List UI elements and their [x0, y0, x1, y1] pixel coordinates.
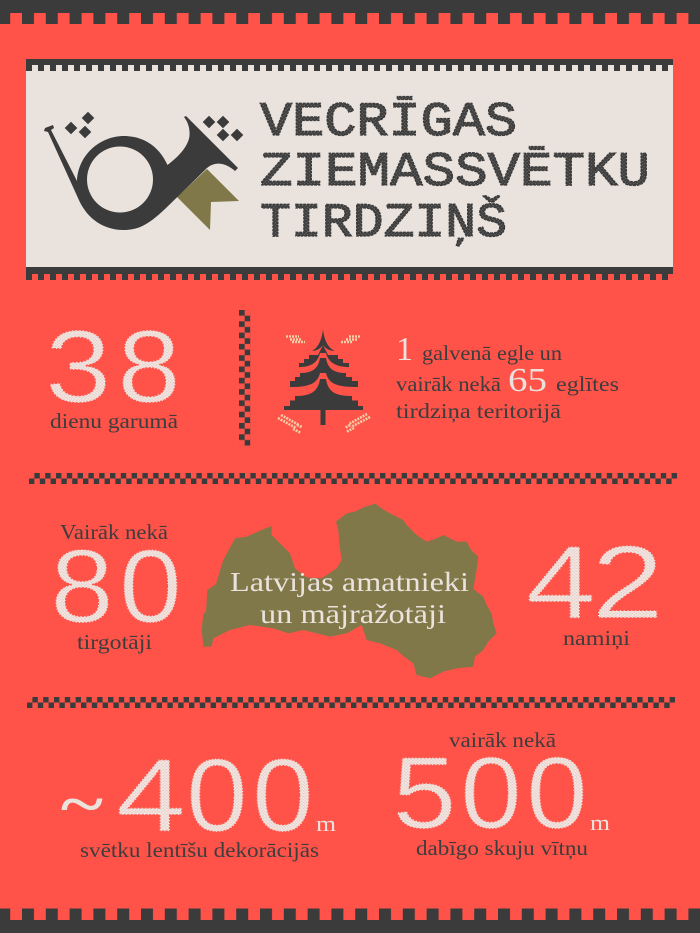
stat: 500 m garlands: 0	[526, 737, 588, 850]
map of Latvia	[202, 503, 497, 678]
map caption: Latvijas amatnieki	[230, 567, 469, 597]
stat: 500 m garlands: dabīgo skuju vītņu	[416, 836, 589, 860]
stat: 80 traders: 0	[119, 528, 182, 644]
title: TIRDZIŅŠ	[260, 195, 507, 251]
text: tree counts: 1	[396, 331, 413, 368]
stat: 500 m garlands: m	[590, 810, 610, 835]
title: VECRĪGAS	[260, 96, 517, 150]
stat: 80 traders: tirgotāji	[77, 630, 152, 654]
text: tree counts: 65	[508, 362, 547, 399]
vertical checker divider	[239, 310, 250, 446]
stat: 400 m ribbons	[60, 737, 336, 862]
icon: post horn with ribbon	[44, 112, 243, 230]
stat: 38 days: dienu garumā	[50, 409, 179, 433]
top border	[0, 0, 700, 24]
text: tree counts: vairāk nekā	[396, 372, 502, 396]
stat: 400 m ribbons: 0	[186, 737, 248, 853]
stat: 500 m garlands	[392, 728, 610, 860]
bottom border	[0, 908, 700, 933]
stat: 38 days: 8	[118, 309, 181, 424]
stat: 80 traders: Vairāk nekā	[60, 520, 169, 544]
text: tree counts: eglītes	[556, 372, 619, 396]
map caption	[230, 567, 469, 629]
stat: 42 houses: 4	[526, 525, 596, 641]
text: tree counts: tirdziņa teritorijā	[396, 399, 562, 423]
title	[260, 96, 650, 251]
panel: title banner	[26, 59, 673, 280]
title: ZIEMASSVĒTKU	[260, 146, 650, 200]
icon: Christmas tree	[278, 329, 370, 433]
stat: 80 traders	[50, 520, 182, 654]
text: tree counts: galvenā egle un	[422, 341, 563, 365]
checker divider	[29, 473, 677, 484]
stat: 38 days: 3	[45, 309, 111, 424]
stat: 42 houses: namiņi	[563, 626, 630, 650]
stat: 42 houses: 2	[592, 523, 664, 640]
stat: 38 days	[45, 309, 181, 433]
stat: 500 m garlands: 0	[460, 737, 522, 850]
stat: 80 traders: 8	[50, 529, 114, 645]
stat: 400 m ribbons: ~	[60, 771, 104, 839]
text: tree counts	[396, 331, 619, 423]
stat: 500 m garlands: 5	[392, 736, 457, 850]
stat: 500 m garlands: vairāk nekā	[449, 728, 557, 752]
stat: 42 houses	[526, 523, 664, 650]
stat: 400 m ribbons: svētku lentīšu dekorācijās	[80, 838, 319, 862]
map caption: un mājražotāji	[260, 599, 446, 629]
checker divider	[27, 697, 675, 708]
stat: 400 m ribbons: m	[316, 811, 336, 836]
stat: 400 m ribbons: 0	[252, 737, 314, 853]
stat: 400 m ribbons: 4	[116, 738, 186, 854]
